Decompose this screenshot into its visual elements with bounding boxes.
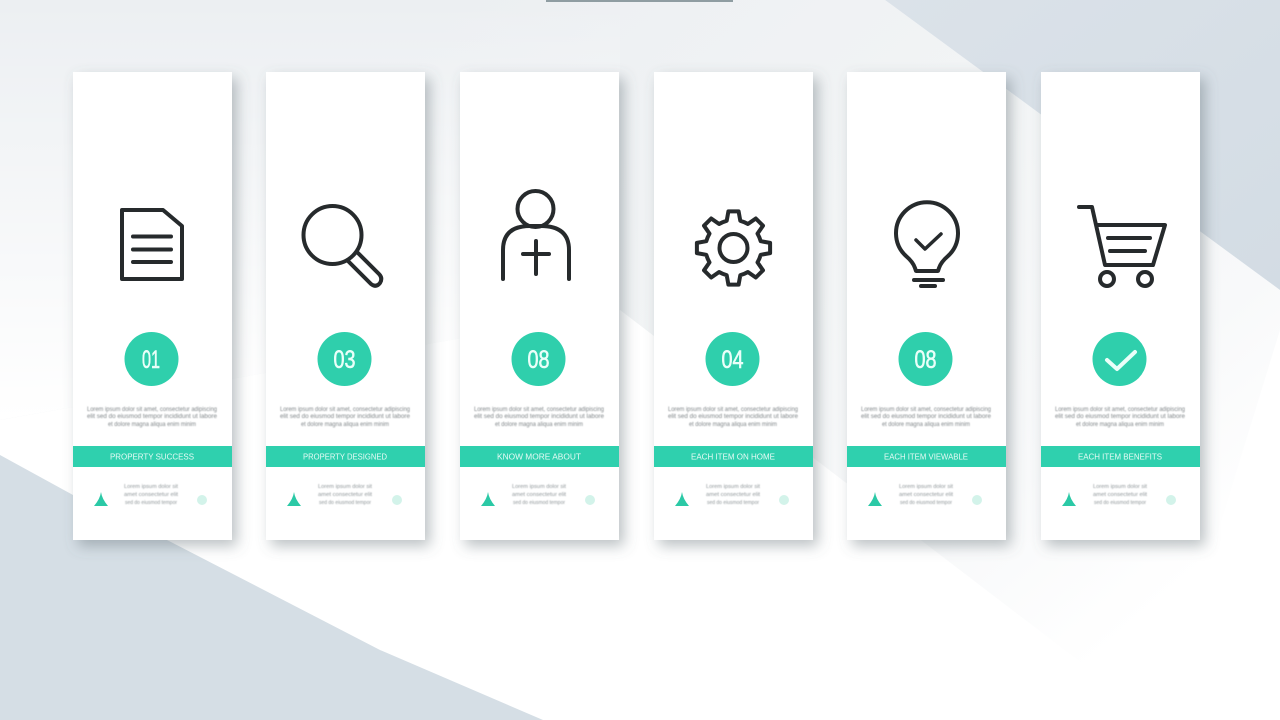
description text: elit sed do eiusmod tempor incididunt ut labore: [668, 414, 799, 420]
footer icon: dot: [585, 495, 595, 505]
footer text: sed do eiusmod tempor: [900, 500, 952, 506]
footer text: Lorem ipsum dolor sit: [706, 484, 760, 490]
panel: step 3: [460, 72, 619, 540]
footer text: amet consectetur elit: [512, 492, 566, 498]
footer text: [899, 484, 953, 506]
card 3: [460, 72, 619, 540]
icon: magnifier: [304, 206, 381, 286]
description text: [861, 407, 992, 428]
description text: [1055, 407, 1186, 428]
banner: [1041, 446, 1200, 467]
banner: [73, 446, 232, 467]
description text: et dolore magna aliqua enim minim: [1076, 422, 1164, 428]
icon: gear: [697, 211, 770, 285]
number badge 01: 01: [142, 346, 160, 374]
footer icon: triangle: [1062, 492, 1076, 506]
footer text: sed do eiusmod tempor: [707, 500, 759, 506]
footer icon: triangle: [287, 492, 301, 506]
footer text: [318, 484, 372, 506]
banner: [847, 446, 1006, 467]
number badge 04: 04: [722, 346, 744, 374]
card 5: [847, 72, 1006, 540]
footer icon: triangle: [868, 492, 882, 506]
description text: Lorem ipsum dolor sit amet, consectetur adipiscing: [1055, 407, 1185, 413]
banner: KNOW MORE ABOUT: [497, 452, 581, 462]
description text: elit sed do eiusmod tempor incididunt ut labore: [861, 414, 992, 420]
description text: Lorem ipsum dolor sit amet, consectetur adipiscing: [668, 407, 798, 413]
number badge 01: [124, 332, 178, 386]
description text: [474, 407, 605, 428]
banner: EACH ITEM VIEWABLE: [884, 452, 968, 462]
banner: [654, 446, 813, 467]
footer icon: dot: [197, 495, 207, 505]
icon: document: [122, 210, 182, 279]
footer text: amet consectetur elit: [899, 492, 953, 498]
footer text: [512, 484, 566, 506]
footer text: amet consectetur elit: [706, 492, 760, 498]
description text: et dolore magna aliqua enim minim: [301, 422, 389, 428]
footer icon: dot: [1166, 495, 1176, 505]
footer text: Lorem ipsum dolor sit: [124, 484, 178, 490]
top title remnant: [546, 0, 733, 2]
description text: elit sed do eiusmod tempor incididunt ut labore: [474, 414, 605, 420]
number badge 08: [512, 332, 566, 386]
footer icon: dot: [392, 495, 402, 505]
footer text: amet consectetur elit: [124, 492, 178, 498]
footer icon: triangle: [481, 492, 495, 506]
description text: Lorem ipsum dolor sit amet, consectetur adipiscing: [280, 407, 410, 413]
card 6: [1041, 72, 1200, 540]
footer text: Lorem ipsum dolor sit: [318, 484, 372, 490]
description text: et dolore magna aliqua enim minim: [689, 422, 777, 428]
footer text: [706, 484, 760, 506]
number badge 08: [898, 332, 952, 386]
description text: et dolore magna aliqua enim minim: [108, 422, 196, 428]
description text: Lorem ipsum dolor sit amet, consectetur adipiscing: [474, 407, 604, 413]
panel: step 1: [73, 72, 232, 540]
footer icon: dot: [779, 495, 789, 505]
footer text: sed do eiusmod tempor: [1094, 500, 1146, 506]
description text: [668, 407, 799, 428]
footer text: sed do eiusmod tempor: [125, 500, 177, 506]
description text: Lorem ipsum dolor sit amet, consectetur adipiscing: [87, 407, 217, 413]
description text: [87, 407, 218, 428]
footer text: amet consectetur elit: [1093, 492, 1147, 498]
footer icon: triangle: [94, 492, 108, 506]
description text: [280, 407, 411, 428]
footer text: [124, 484, 178, 506]
description text: et dolore magna aliqua enim minim: [495, 422, 583, 428]
description text: Lorem ipsum dolor sit amet, consectetur adipiscing: [861, 407, 991, 413]
footer icon: triangle: [675, 492, 689, 506]
panel: step 6: [1041, 72, 1200, 540]
description text: elit sed do eiusmod tempor incididunt ut labore: [280, 414, 411, 420]
card 4: [654, 72, 813, 540]
number badge 03: 03: [334, 346, 356, 374]
footer text: Lorem ipsum dolor sit: [899, 484, 953, 490]
footer text: sed do eiusmod tempor: [319, 500, 371, 506]
description text: elit sed do eiusmod tempor incididunt ut labore: [1055, 414, 1186, 420]
banner: PROPERTY SUCCESS: [110, 452, 194, 462]
number badge 04: [706, 332, 760, 386]
icon: shopping cart: [1079, 207, 1165, 286]
banner: [460, 446, 619, 467]
footer text: sed do eiusmod tempor: [513, 500, 565, 506]
description text: et dolore magna aliqua enim minim: [882, 422, 970, 428]
number badge 03: [318, 332, 372, 386]
panel: step 5: [847, 72, 1006, 540]
panel: step 2: [266, 72, 425, 540]
footer icon: dot: [972, 495, 982, 505]
card 2: [266, 72, 425, 540]
panel: step 4: [654, 72, 813, 540]
footer text: Lorem ipsum dolor sit: [1093, 484, 1147, 490]
description text: elit sed do eiusmod tempor incididunt ut labore: [87, 414, 218, 420]
number badge 08: 08: [528, 346, 550, 374]
check badge: [1092, 332, 1146, 386]
banner: EACH ITEM ON HOME: [691, 452, 775, 462]
icon: light bulb with check: [896, 202, 958, 286]
footer text: Lorem ipsum dolor sit: [512, 484, 566, 490]
card 1: [73, 72, 232, 540]
banner: [266, 446, 425, 467]
footer text: amet consectetur elit: [318, 492, 372, 498]
banner: EACH ITEM BENEFITS: [1078, 452, 1162, 462]
footer text: [1093, 484, 1147, 506]
icon: person with plus: [503, 191, 569, 279]
banner: PROPERTY DESIGNED: [303, 452, 387, 462]
number badge 08: 08: [914, 346, 936, 374]
